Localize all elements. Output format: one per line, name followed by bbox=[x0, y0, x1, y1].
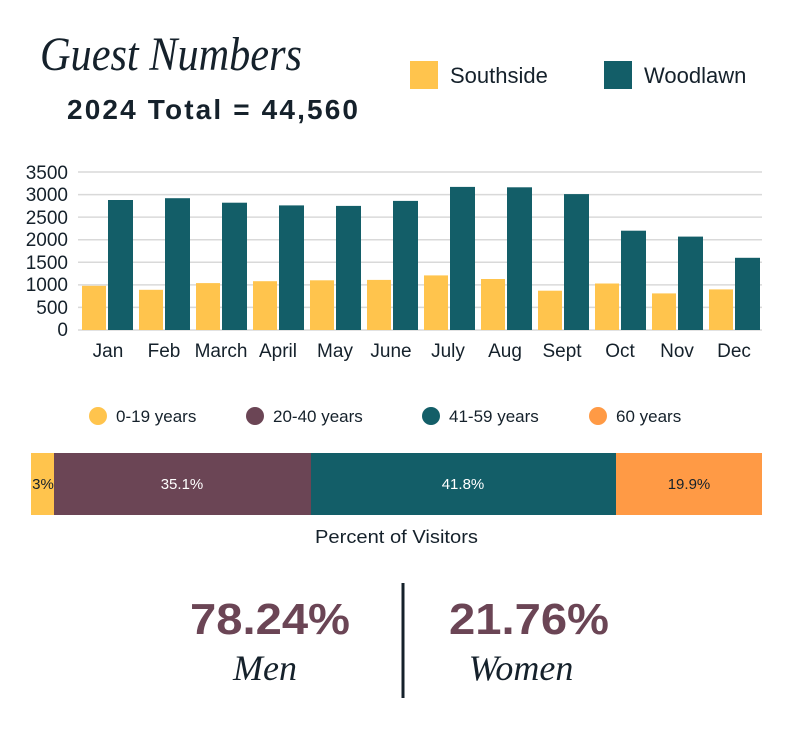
title: Guest Numbers bbox=[40, 28, 302, 81]
bar chart: Aug bbox=[488, 341, 522, 362]
stacked bar: age distribution: 41.8% bbox=[442, 476, 484, 493]
bar chart: 0 bbox=[57, 320, 68, 341]
bar chart: June bbox=[370, 341, 412, 362]
stat: women bbox=[449, 595, 609, 688]
legend: age groups: 0-19 years bbox=[116, 407, 196, 426]
bar chart: 3000 bbox=[26, 185, 68, 206]
bar chart: Nov bbox=[660, 341, 694, 362]
bar chart: March bbox=[195, 341, 247, 362]
stat: men: 78.24% bbox=[190, 595, 350, 644]
bar chart: May bbox=[317, 341, 353, 362]
total text: 2024 Total = 44,560 bbox=[67, 94, 358, 125]
bar chart: July bbox=[431, 341, 465, 362]
bar chart: 2500 bbox=[26, 208, 68, 229]
caption: Percent of Visitors bbox=[315, 527, 478, 547]
legend: age groups: 20-40 years bbox=[273, 407, 363, 426]
legend: sites: Woodlawn bbox=[644, 63, 746, 88]
bar chart bbox=[26, 163, 762, 362]
bar chart: 500 bbox=[36, 298, 68, 319]
bar chart: 1500 bbox=[26, 253, 68, 274]
bar chart: Sept bbox=[542, 341, 582, 362]
stacked bar: age distribution bbox=[31, 453, 762, 515]
stacked bar: age distribution: 35.1% bbox=[161, 476, 203, 493]
bar chart: 1000 bbox=[26, 275, 68, 296]
stat: women: 21.76% bbox=[449, 595, 609, 644]
bar chart: 3500 bbox=[26, 163, 68, 184]
stacked bar: age distribution: 3% bbox=[32, 476, 54, 493]
bar chart: Feb bbox=[148, 341, 180, 362]
stat: men bbox=[190, 595, 350, 688]
legend: age groups: 60 years bbox=[616, 407, 681, 426]
legend: sites: Southside bbox=[450, 63, 548, 88]
bar chart: Oct bbox=[605, 341, 635, 362]
bar chart: April bbox=[259, 341, 297, 362]
legend: age groups bbox=[89, 407, 681, 426]
bar chart: Dec bbox=[717, 341, 751, 362]
stacked bar: age distribution: 19.9% bbox=[668, 476, 710, 493]
bar chart: 2000 bbox=[26, 230, 68, 251]
divider bbox=[402, 583, 404, 698]
bar chart: Jan bbox=[93, 341, 123, 362]
legend: age groups: 41-59 years bbox=[449, 407, 539, 426]
stat: men: Men bbox=[232, 648, 297, 688]
stat: women: Women bbox=[469, 648, 573, 688]
legend: sites bbox=[410, 61, 746, 89]
